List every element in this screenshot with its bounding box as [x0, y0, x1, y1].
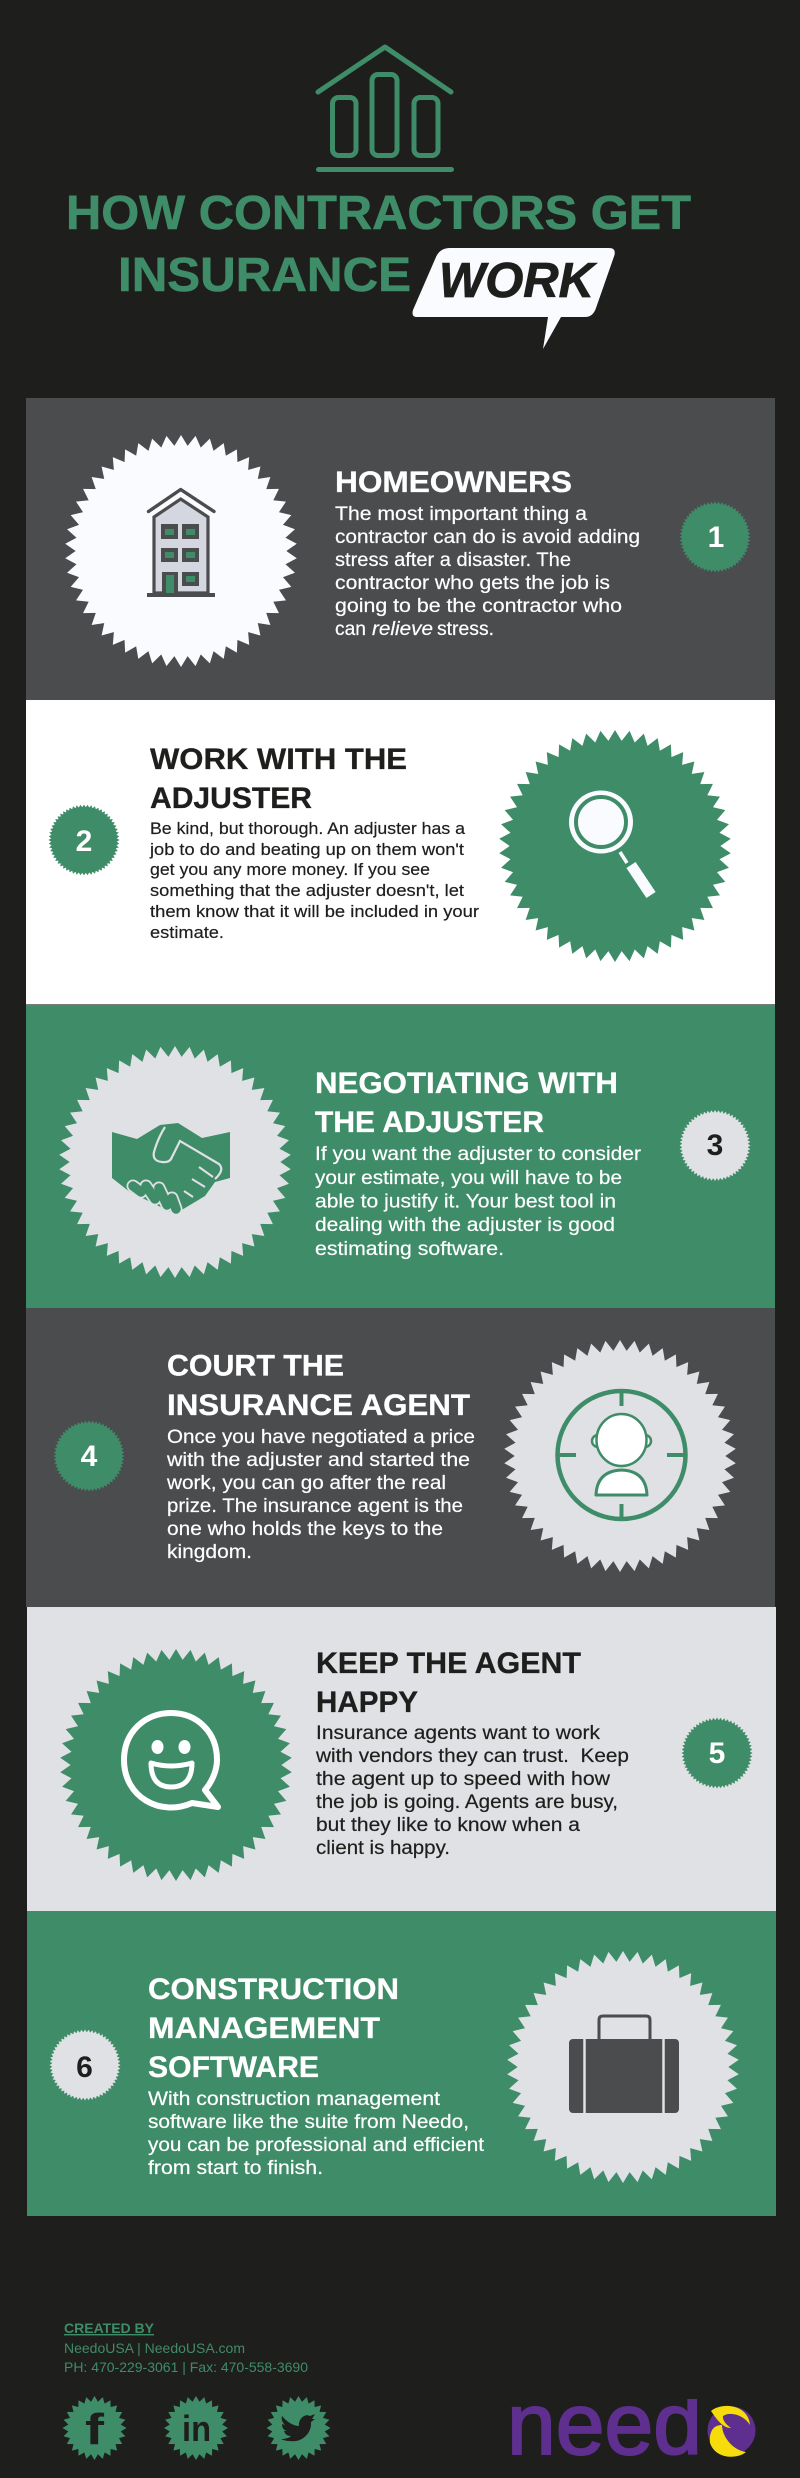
- body text: kingdom.: [167, 1542, 252, 1563]
- body text: you can be professional and efficient: [148, 2135, 485, 2156]
- body text: stress.: [437, 619, 494, 640]
- heading: [148, 1973, 399, 2084]
- body text: from start to finish.: [148, 2158, 323, 2179]
- heading: [315, 1067, 618, 1139]
- body text: but they like to know when a: [316, 1815, 580, 1836]
- starburst with target person: [490, 1326, 750, 1586]
- body text: dealing with the adjuster is good: [315, 1215, 615, 1236]
- body text: With construction management: [148, 2089, 441, 2110]
- body text: Be kind, but thorough. An adjuster has a: [150, 819, 466, 838]
- footer credits: [64, 2320, 308, 2375]
- heading: [167, 1350, 470, 1422]
- body text: contractor can do is avoid adding: [335, 527, 640, 548]
- number badge 4: [40, 1413, 133, 1505]
- body text: client is happy.: [316, 1838, 450, 1859]
- body text: your estimate, you will have to be: [315, 1168, 622, 1189]
- body text: estimating software.: [315, 1239, 504, 1260]
- logo: needo: need: [507, 2376, 702, 2473]
- icon: linkedin: in: [182, 2408, 211, 2449]
- body text: work, you can go after the real: [166, 1473, 446, 1494]
- panel: work with the adjuster: [26, 700, 775, 1006]
- icon: facebook: [54, 2390, 135, 2466]
- logo: needo: [512, 2399, 756, 2457]
- starburst with building: [51, 421, 311, 681]
- icon: twitter: [258, 2390, 339, 2466]
- body text: [315, 1144, 642, 1260]
- body text: one who holds the keys to the: [167, 1519, 443, 1540]
- heading: KEEP THE AGENT: [316, 1647, 581, 1680]
- heading: CONSTRUCTION: [148, 1973, 399, 2006]
- body text: estimate.: [150, 923, 224, 942]
- starburst with magnifier: [485, 716, 745, 976]
- speech bubble: work: WORK: [439, 254, 598, 308]
- body text: [148, 2089, 485, 2179]
- body text: able to justify it. Your best tool in: [315, 1192, 616, 1212]
- heading: HOMEOWNERS: [335, 466, 572, 499]
- title: INSURANCE: [118, 249, 411, 302]
- panel: homeowners: [26, 398, 775, 700]
- number badge 4: 4: [81, 1440, 98, 1473]
- icon: house logo: [316, 47, 454, 172]
- body text: relieve: [372, 619, 433, 640]
- body text: Once you have negotiated a price: [167, 1427, 475, 1448]
- number badge 1: 1: [708, 521, 724, 554]
- starburst with smiley speech bubble: [46, 1635, 306, 1895]
- heading: THE ADJUSTER: [315, 1106, 544, 1139]
- body text: stress after a disaster. The: [335, 550, 571, 571]
- heading: ADJUSTER: [150, 782, 312, 815]
- body text: prize. The insurance agent is the: [167, 1496, 463, 1517]
- starburst with briefcase: [493, 1937, 753, 2197]
- body text: the agent up to speed with how: [316, 1769, 610, 1790]
- panel: construction management software: [27, 1911, 776, 2216]
- number badge 6: [36, 2022, 129, 2114]
- heading: [150, 743, 407, 815]
- number badge 3: 3: [707, 1129, 723, 1162]
- heading: SOFTWARE: [148, 2051, 319, 2084]
- body text: job to do and beating up on them won't: [149, 840, 464, 859]
- heading: WORK WITH THE: [150, 743, 407, 776]
- body text: with the adjuster and started the: [166, 1450, 470, 1471]
- number badge 6: 6: [76, 2051, 93, 2084]
- title: HOW CONTRACTORS GET: [66, 187, 691, 240]
- heading: HAPPY: [316, 1686, 418, 1719]
- footer credits: CREATED BY: [64, 2320, 155, 2336]
- body text: something that the adjuster doesn't, let: [150, 881, 464, 900]
- speech bubble: work: [412, 248, 615, 349]
- body text: Insurance agents want to work: [316, 1723, 601, 1744]
- number badge 2: [35, 797, 128, 889]
- footer credits: PH: 470-229-3061 | Fax: 470-558-3690: [64, 2359, 308, 2375]
- panel: negotiating with the adjuster: [26, 1006, 775, 1308]
- number badge 1: [666, 494, 759, 586]
- body text: [335, 504, 640, 640]
- icon: linkedin: [156, 2390, 236, 2466]
- body text: [166, 1427, 475, 1563]
- heading: COURT THE: [167, 1350, 344, 1382]
- body text: them know that it will be included in your: [150, 902, 479, 921]
- body text: the job is going. Agents are busy,: [316, 1792, 618, 1813]
- footer credits: NeedoUSA | NeedoUSA.com: [64, 2340, 245, 2356]
- body text: [315, 1723, 629, 1859]
- title: [66, 187, 691, 302]
- panel: court the insurance agent: [26, 1308, 775, 1607]
- heading: INSURANCE AGENT: [167, 1389, 470, 1422]
- body text: can: [335, 619, 366, 640]
- body text: contractor who gets the job is: [335, 573, 610, 594]
- body text: going to be the contractor who: [335, 596, 622, 617]
- heading: NEGOTIATING WITH: [315, 1067, 618, 1100]
- heading: MANAGEMENT: [148, 2012, 380, 2045]
- body text: software like the suite from Needo,: [148, 2112, 469, 2133]
- panel: keep the agent happy: [27, 1607, 776, 1911]
- body text: get you any more money. If you see: [150, 860, 430, 879]
- body text: The most important thing a: [335, 504, 587, 525]
- starburst with handshake: [45, 1032, 305, 1292]
- body text: with vendors they can trust. Keep: [315, 1746, 629, 1767]
- number badge 5: 5: [709, 1737, 725, 1770]
- body text: If you want the adjuster to consider: [315, 1144, 642, 1165]
- icon: facebook: f: [85, 2405, 104, 2454]
- number badge 3: [666, 1102, 759, 1194]
- body text: [149, 819, 479, 942]
- number badge 5: [668, 1710, 761, 1802]
- number badge 2: 2: [76, 825, 92, 858]
- heading: [316, 1647, 581, 1719]
